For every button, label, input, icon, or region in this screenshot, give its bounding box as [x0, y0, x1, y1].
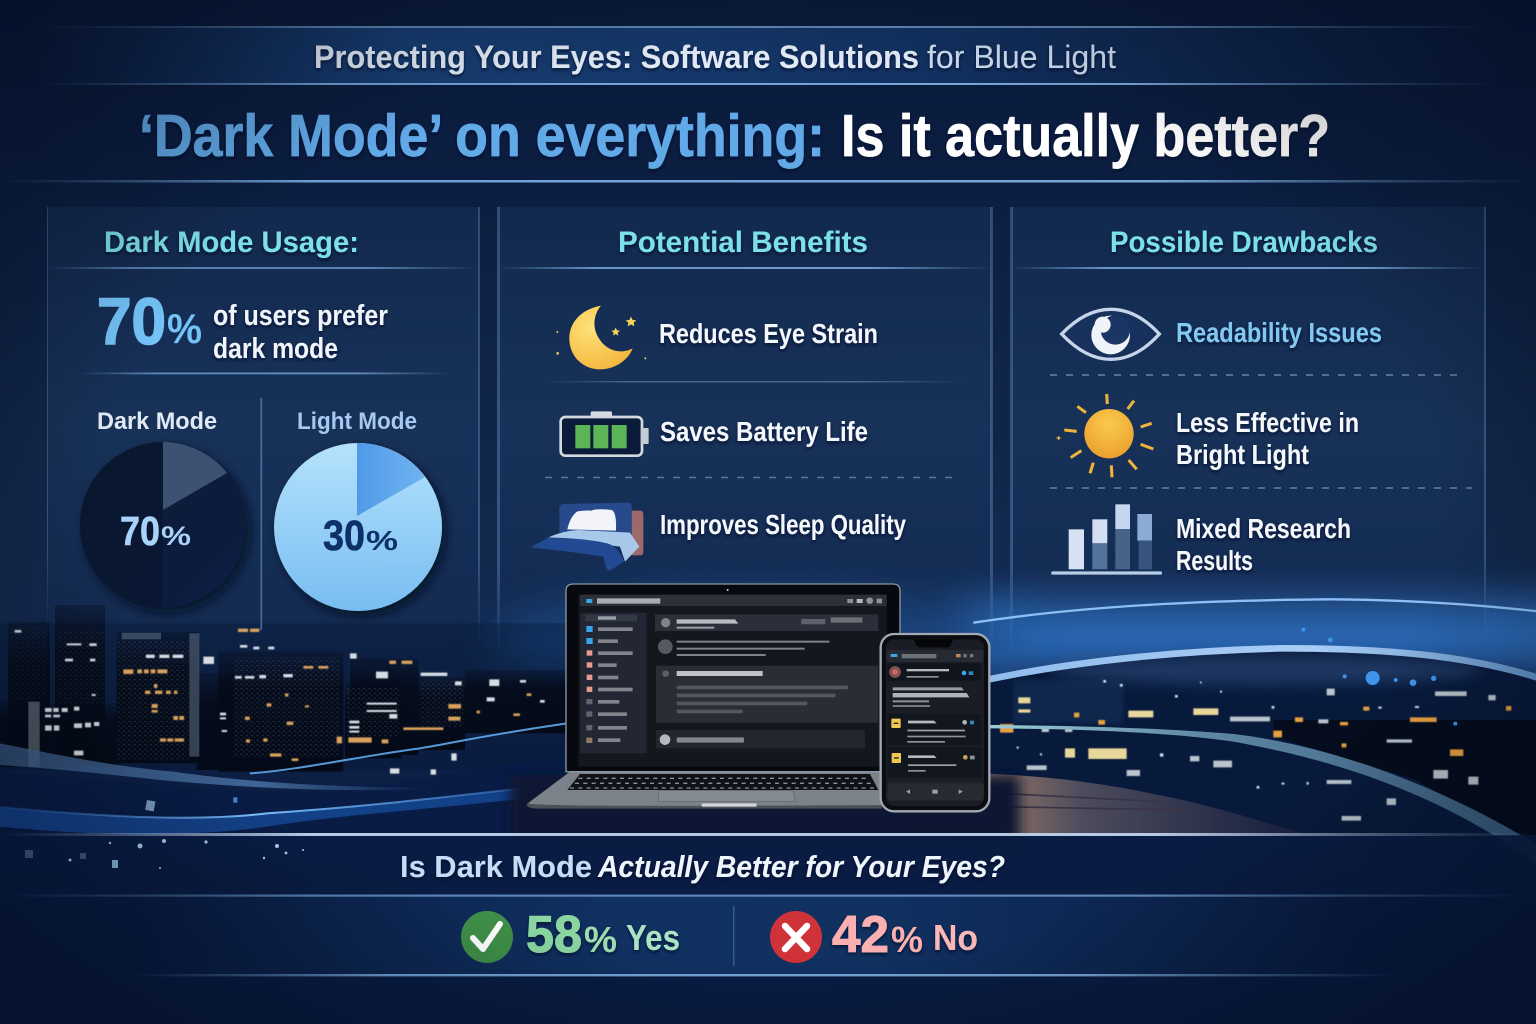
drawback: mixed research results	[1176, 513, 1351, 576]
stat description	[213, 300, 388, 365]
icon: cross	[770, 911, 822, 963]
icon: bed	[530, 503, 643, 571]
stat description: of users prefer	[213, 300, 388, 332]
heading: dark mode usage: Dark Mode Usage:	[104, 226, 359, 259]
pie chart: dark mode: %	[161, 521, 191, 551]
result: 42 percent no: No	[933, 917, 978, 958]
cityscape: left	[0, 605, 572, 775]
top banner text: for Blue Light	[927, 39, 1116, 75]
result: 42 percent no: %	[891, 919, 923, 960]
benefit: saves battery life: Saves Battery Life	[660, 416, 868, 447]
main title	[139, 103, 1330, 169]
icon: moon	[556, 306, 646, 369]
result: 58 percent yes: 58	[526, 906, 582, 964]
benefit: improves sleep quality: Improves Sleep Quality	[660, 509, 906, 540]
question text	[400, 849, 1005, 884]
heading: possible drawbacks: Possible Drawbacks	[1110, 226, 1378, 259]
cool windows	[15, 630, 545, 775]
stat: 70 percent	[97, 284, 202, 358]
panel: dark mode usage	[47, 226, 479, 630]
top banner	[40, 26, 1496, 85]
background: central blue glow behind laptop	[490, 590, 1030, 690]
stat description: dark mode	[213, 333, 338, 365]
heading: potential benefits: Potential Benefits	[618, 226, 868, 259]
pie chart: light mode: 30	[323, 512, 365, 560]
panel: potential benefits	[498, 226, 992, 571]
background: dark floor under devices	[510, 775, 1020, 845]
pie chart: light mode: %	[366, 525, 398, 556]
panel: benefits backdrop	[498, 207, 992, 647]
icon: check	[461, 911, 513, 963]
drawback: less effective in bright light: Bright Light	[1176, 439, 1309, 470]
result: 58 percent yes: Yes	[626, 917, 680, 958]
drawback: less effective in bright light	[1176, 407, 1359, 470]
warm windows	[123, 629, 531, 761]
laptop message rows	[655, 614, 878, 748]
panel: possible drawbacks	[1011, 226, 1486, 576]
cityscape: right	[867, 599, 1536, 867]
swoosh: left lower waves	[0, 723, 567, 867]
benefit: reduces eye strain: Reduces Eye Strain	[659, 318, 878, 349]
device: laptop	[527, 584, 900, 809]
icon: sun	[1055, 394, 1153, 477]
panel edges	[47, 207, 1486, 657]
pie chart: dark mode: 70	[120, 508, 160, 554]
result: 42 percent no: 42	[832, 906, 889, 964]
pie chart: light mode	[274, 443, 442, 611]
icon: battery	[561, 411, 649, 456]
panel: drawbacks backdrop	[1011, 207, 1486, 647]
bottom question panel	[0, 833, 1536, 1024]
top banner text: Protecting Your Eyes: Software Solutions	[314, 39, 919, 75]
background: right blue sky	[960, 600, 1536, 670]
pie chart: dark mode	[80, 442, 246, 608]
label: dark mode: Dark Mode	[97, 408, 217, 435]
main title: Is it actually better?	[841, 103, 1330, 169]
result: 58 percent yes: %	[584, 919, 617, 960]
result: 42 percent no	[832, 906, 978, 964]
particles: lower left	[25, 839, 304, 869]
icon: eye	[1062, 309, 1159, 359]
drawback: mixed research results: Mixed Research	[1176, 513, 1351, 544]
main title: ‘Dark Mode’ on everything:	[139, 103, 825, 169]
panel: usage backdrop	[47, 207, 479, 647]
title rule	[0, 180, 1536, 182]
result: 58 percent yes	[526, 906, 680, 964]
drawback: less effective in bright light: Less Effective in	[1176, 407, 1359, 438]
drawback: mixed research results: Results	[1176, 545, 1253, 576]
drawback: readability issues: Readability Issues	[1176, 317, 1382, 348]
question text: Actually Better for Your Eyes?	[597, 849, 1005, 884]
stat: 70 percent: 70	[97, 284, 166, 358]
laptop sidebar	[580, 613, 647, 753]
question text: Is Dark Mode	[400, 849, 592, 884]
device: phone	[881, 634, 989, 811]
icon: bar chart	[1051, 504, 1162, 575]
label: light mode: Light Mode	[297, 408, 417, 435]
stat: 70 percent: %	[167, 305, 202, 352]
